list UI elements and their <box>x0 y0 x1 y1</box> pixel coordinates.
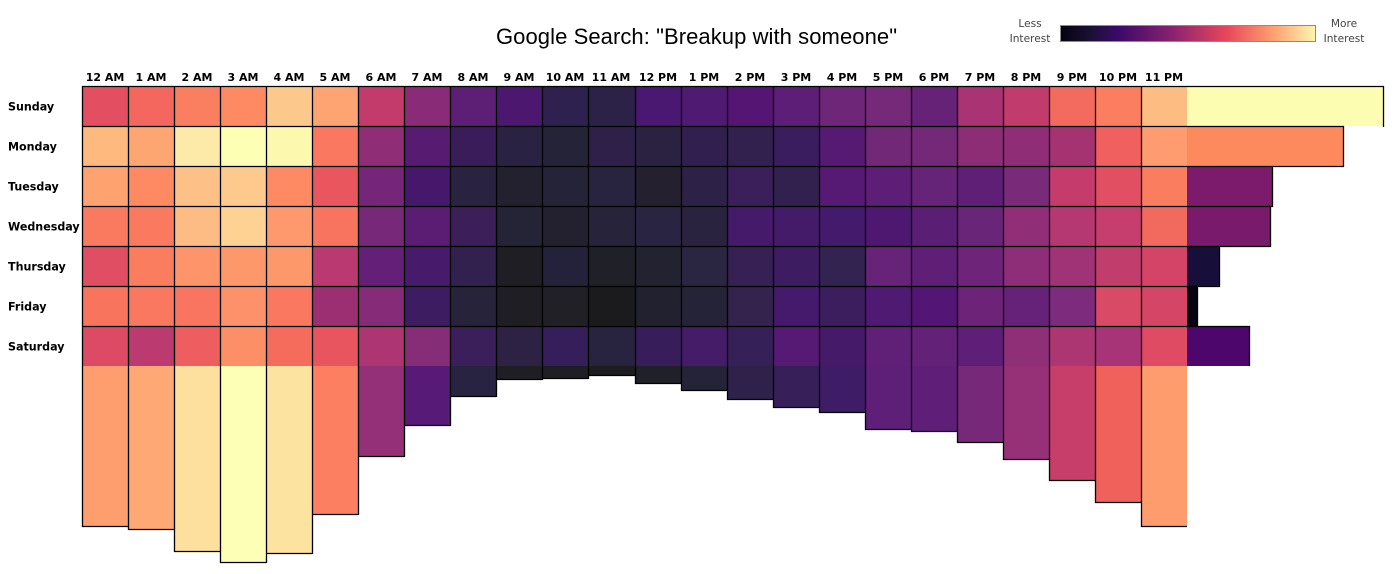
hour axis labels: 9 PM <box>1057 71 1087 84</box>
hour axis labels: 1 PM <box>689 71 719 84</box>
hour axis labels: 4 AM <box>274 71 304 84</box>
row: Thursday <box>82 246 1187 286</box>
hour axis labels: 8 AM <box>458 71 488 84</box>
legend <box>1010 18 1364 45</box>
hour axis labels: 9 AM <box>504 71 534 84</box>
hour axis labels: 5 PM <box>873 71 903 84</box>
title: Google Search: "Breakup with someone" <box>496 24 897 49</box>
heatmap <box>82 86 1187 366</box>
hour axis labels: 12 AM <box>86 71 124 84</box>
hour axis labels: 7 PM <box>965 71 995 84</box>
day axis labels: Saturday <box>8 340 65 354</box>
day axis labels: Monday <box>8 140 58 154</box>
bar chart: hour totals <box>82 366 1187 562</box>
hour axis labels: 7 AM <box>412 71 442 84</box>
legend high label: More <box>1331 18 1357 30</box>
row: Friday <box>82 286 1187 326</box>
row: Monday <box>82 126 1187 166</box>
day axis labels: Friday <box>8 300 47 314</box>
hour axis labels: 4 PM <box>827 71 857 84</box>
row: Tuesday <box>82 166 1187 206</box>
hour axis labels: 2 AM <box>182 71 212 84</box>
hour axis labels: 6 PM <box>919 71 949 84</box>
hour axis labels: 5 AM <box>320 71 350 84</box>
hour axis labels: 2 PM <box>735 71 765 84</box>
legend high label: Interest <box>1324 33 1364 45</box>
day axis labels: Thursday <box>8 260 67 274</box>
day axis labels: Tuesday <box>8 180 59 194</box>
hour axis labels: 10 PM <box>1099 71 1137 84</box>
hour axis labels: 11 PM <box>1145 71 1183 84</box>
hour axis labels: 12 PM <box>639 71 677 84</box>
legend colour ramp <box>1060 26 1316 42</box>
hour axis labels: 8 PM <box>1011 71 1041 84</box>
legend high label <box>1324 18 1364 45</box>
bar chart: day totals <box>1187 86 1383 366</box>
row: Saturday <box>82 326 1187 366</box>
legend low label <box>1010 18 1050 45</box>
hour axis labels: 3 AM <box>228 71 258 84</box>
hour axis labels: 1 AM <box>136 71 166 84</box>
hour axis labels: 6 AM <box>366 71 396 84</box>
day axis labels: Wednesday <box>8 220 80 234</box>
row: Sunday <box>82 86 1187 126</box>
hour axis labels: 3 PM <box>781 71 811 84</box>
day axis labels <box>8 100 80 354</box>
legend low label: Less <box>1018 18 1042 30</box>
hour axis labels: 10 AM <box>546 71 584 84</box>
hour axis labels: 11 AM <box>592 71 630 84</box>
legend low label: Interest <box>1010 33 1050 45</box>
hour axis labels <box>86 71 1183 84</box>
row: Wednesday <box>82 206 1187 246</box>
day axis labels: Sunday <box>8 100 55 114</box>
